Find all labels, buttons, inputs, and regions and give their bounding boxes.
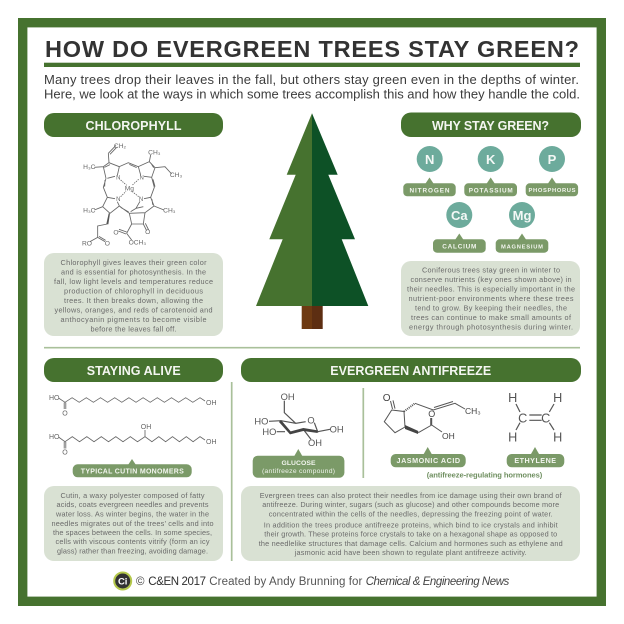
cutin monomer 2: OH — [206, 439, 216, 446]
heading: evergreen antifreeze: EVERGREEN ANTIFREEZE — [330, 364, 491, 378]
chlorophyll molecule: N — [116, 197, 120, 203]
nutrient: calcium: Ca — [451, 208, 468, 223]
nutrient: phosphorus — [526, 146, 578, 196]
footer credit: Chemical & Engineering News — [366, 576, 510, 588]
intro text: Here, we look at the ways in which some trees accomplish this and how they handle the cold. — [44, 86, 580, 101]
nutrient: magnesium — [496, 202, 548, 253]
text block: chlorophyll: Chlorophyll gives leaves their green color — [60, 258, 207, 267]
chlorophyll molecule: O — [145, 229, 150, 236]
chlorophyll molecule: N — [116, 175, 120, 181]
chlorophyll molecule: CH₃ — [170, 172, 182, 179]
jasmonic acid molecule: OH — [442, 431, 455, 441]
nutrient: calcium — [433, 202, 486, 253]
footer credit: C&EN 2017 — [148, 576, 206, 588]
chlorophyll molecule: N — [139, 197, 143, 203]
caption: hormones: (antifreeze-regulating hormones) — [427, 470, 543, 479]
text block: staying alive: water loss. As winter begins, the water in the — [55, 510, 209, 518]
chlorophyll molecule: Mg — [125, 186, 134, 193]
label: ethylene: ETHYLENE — [514, 456, 556, 465]
text block: why stay green: nutrient-poor environments where these trees — [408, 294, 574, 303]
cutin monomer 2 — [49, 424, 216, 456]
text block: staying alive: cells with viscous contents vitrify (form an icy — [56, 537, 210, 546]
icon: compound interest logo: Ci — [118, 576, 127, 588]
text block: staying alive: needles migrates out of the trees’ cells and into — [52, 519, 214, 528]
label: jasmonic acid — [391, 447, 466, 467]
nutrient: potassium: K — [486, 152, 496, 167]
cutin monomer 1: OH — [206, 400, 216, 407]
glucose molecule: OH — [281, 392, 295, 402]
ethylene molecule: C — [518, 411, 527, 425]
illustration: evergreen tree — [256, 113, 368, 329]
glucose molecule: HO — [262, 427, 276, 437]
glucose molecule: OH — [330, 425, 344, 435]
heading: staying alive: STAYING ALIVE — [87, 364, 181, 378]
text block: staying alive: the spaces between the cells. In some species, — [53, 528, 212, 537]
intro text — [44, 72, 580, 101]
heading: chlorophyll: CHLOROPHYLL — [86, 119, 182, 133]
text block: why stay green: energy through photosynthesis during winter. — [409, 322, 573, 331]
jasmonic acid molecule: O — [428, 409, 435, 419]
text block: chlorophyll: trees. It then breaks down, allowing the — [64, 296, 203, 305]
glucose molecule: OH — [308, 438, 322, 448]
nutrient: potassium: POTASSIUM — [469, 187, 513, 194]
icon: compound interest logo — [114, 572, 131, 590]
footer credit: Created by Andy Brunning for — [209, 576, 362, 588]
label: typical cutin monomers — [73, 459, 192, 477]
ethylene molecule: C — [541, 411, 550, 425]
text block: evergreen antifreeze — [241, 486, 580, 561]
cutin monomer 2: HO — [49, 434, 60, 441]
jasmonic acid molecule: O — [383, 393, 391, 404]
text block: evergreen antifreeze: jasmonic acid have been shown to regulate plant antifreeze activity. — [294, 548, 527, 557]
jasmonic acid molecule — [383, 393, 481, 441]
text block: staying alive: acids, coats evergreen needles and prevents — [56, 500, 209, 509]
footer credit — [114, 572, 510, 590]
text block: why stay green: trees can continue to make small amounts of — [411, 313, 572, 322]
label: jasmonic acid: JASMONIC ACID — [397, 456, 460, 465]
chlorophyll molecule: OCH₃ — [129, 240, 146, 247]
chlorophyll molecule: O — [105, 240, 110, 247]
nutrient: magnesium: MAGNESIUM — [501, 244, 543, 250]
text block: chlorophyll — [44, 253, 223, 336]
nutrient: calcium: CALCIUM — [442, 244, 476, 250]
ethylene molecule: H — [508, 430, 517, 444]
cutin monomer 1 — [49, 395, 216, 418]
text block: why stay green: conserve nutrients (key ones shown above) in — [410, 275, 572, 284]
text block: chlorophyll: before the leaves fall off. — [90, 324, 176, 333]
label: ethylene — [507, 447, 564, 467]
label: typical cutin monomers: TYPICAL CUTIN MONOMERS — [81, 468, 184, 475]
text block: evergreen antifreeze: concentrated within the cells of the needles, depressing the freezing point of water. — [269, 510, 553, 518]
text block: why stay green: their needles. This is especially important in the — [407, 284, 575, 293]
label: glucose: (antifreeze compound) — [262, 468, 335, 475]
panel: staying alive — [44, 358, 223, 561]
cutin monomer 2: OH — [141, 424, 151, 431]
chlorophyll molecule — [82, 143, 182, 247]
glucose molecule: HO — [254, 417, 268, 427]
nutrient: potassium — [464, 146, 517, 196]
cutin monomer 1: HO — [49, 395, 60, 402]
cutin monomer 2: O — [62, 450, 68, 456]
text block: chlorophyll: yellows, oranges, and reds of carotenoid and — [54, 305, 212, 314]
title: HOW DO EVERGREEN TREES STAY GREEN? — [45, 36, 579, 62]
text block: evergreen antifreeze: the needlelike structures that damage cells. Calcium and hormones such as ethylene and — [259, 539, 563, 548]
chlorophyll molecule: N — [140, 175, 144, 181]
chlorophyll molecule: O — [113, 229, 119, 236]
text block: chlorophyll: anthocyanin pigments to become visible — [60, 315, 206, 324]
label: glucose — [253, 449, 344, 478]
text block: evergreen antifreeze: antifreeze. During winter, sugars (such as glucose) and other compounds become more — [262, 500, 559, 509]
glucose molecule: O — [307, 415, 315, 425]
nutrient: nitrogen: N — [425, 152, 434, 167]
ethylene molecule: H — [553, 391, 562, 405]
text block: chlorophyll: fall, low light levels and temperatures reduce — [54, 277, 213, 286]
nutrient: phosphorus: PHOSPHORUS — [528, 188, 576, 194]
text block: chlorophyll: and is essential for photosynthesis. In the — [61, 267, 206, 276]
ethylene molecule: H — [553, 430, 562, 444]
nutrient: nitrogen — [403, 146, 456, 196]
panel: evergreen antifreeze — [241, 358, 581, 561]
chlorophyll molecule: CH₃ — [148, 150, 161, 157]
jasmonic acid molecule: CH₃ — [465, 406, 481, 416]
text block: why stay green: Coniferous trees stay green in winter to — [422, 265, 560, 274]
heading: why stay green: WHY STAY GREEN? — [432, 119, 549, 133]
heading: evergreen antifreeze — [241, 358, 581, 382]
heading: staying alive — [44, 358, 223, 382]
label: glucose: GLUCOSE — [282, 460, 316, 467]
heading: why stay green — [401, 112, 581, 137]
text block: evergreen antifreeze: Evergreen trees can also protect their needles from ice damage using their own brand of — [260, 491, 563, 500]
heading: chlorophyll — [44, 113, 223, 137]
text block: staying alive: glass) rather than freezing, avoiding damage. — [57, 546, 208, 556]
chlorophyll molecule: CH₃ — [163, 208, 176, 215]
chlorophyll molecule: CH₂ — [114, 143, 127, 150]
text block: why stay green — [401, 261, 580, 336]
ethylene molecule: H — [508, 391, 517, 405]
chlorophyll molecule: H₃C — [83, 164, 96, 171]
chlorophyll molecule: RO — [82, 240, 92, 247]
text block: staying alive: Cutin, a waxy polyester composed of fatty — [60, 491, 205, 500]
panel: chlorophyll — [44, 113, 223, 336]
cutin monomer 1: O — [62, 410, 68, 418]
footer credit: © — [136, 576, 145, 588]
nutrient: magnesium: Mg — [513, 208, 531, 223]
nutrient: nitrogen: NITROGEN — [410, 187, 450, 194]
chlorophyll molecule: H₃C — [83, 207, 96, 214]
text block: staying alive — [44, 486, 223, 561]
text block: evergreen antifreeze: their growth. These proteins force crystals to take on a hexagonal shape as opposed to — [264, 530, 557, 538]
intro text: Many trees drop their leaves in the fall, but others stay green even in the depths of winter. — [44, 72, 579, 87]
text block: why stay green: tend to grow. By keeping their needles, the — [415, 303, 567, 312]
text block: evergreen antifreeze: In addition the trees produce antifreeze proteins, which bind to ice crystals and inhibit — [264, 520, 558, 530]
text block: chlorophyll: production of chlorophyll in deciduous — [64, 286, 203, 295]
panel: why stay green — [401, 112, 581, 336]
nutrient: phosphorus: P — [548, 152, 557, 167]
ethylene molecule — [508, 391, 562, 444]
glucose molecule — [254, 392, 344, 448]
